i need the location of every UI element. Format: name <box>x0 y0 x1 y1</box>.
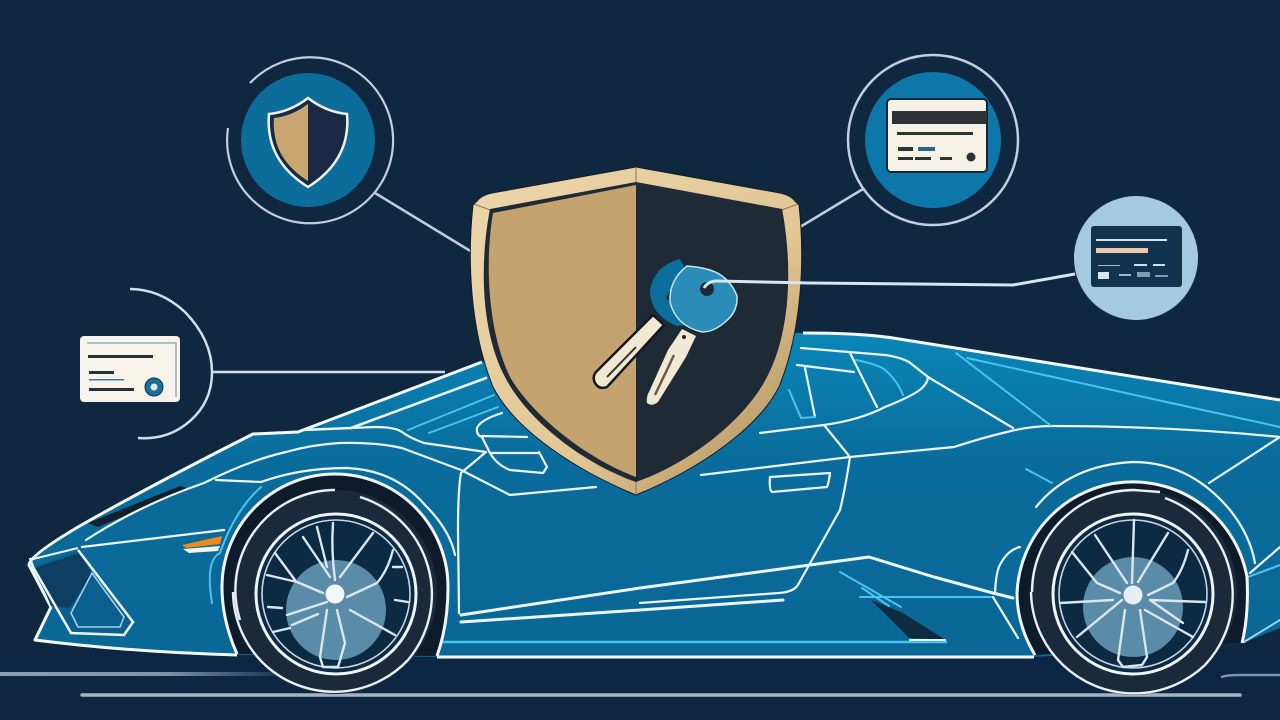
front lights and vents <box>30 486 222 635</box>
connector: top-left badge to shield <box>375 193 472 252</box>
badge disc <box>1074 196 1198 320</box>
badge: credit card <box>848 55 1018 225</box>
shield left half <box>489 185 636 477</box>
connector: top-right badge to shield <box>800 189 863 227</box>
hub <box>1124 586 1142 604</box>
road lines <box>0 672 1280 695</box>
connector: left card to shield <box>212 371 445 373</box>
side vent <box>871 600 946 640</box>
key: front blade <box>647 329 696 405</box>
rear wheel <box>1017 482 1247 695</box>
card icon <box>887 99 987 172</box>
shield frame <box>470 167 802 495</box>
central shield with keys <box>470 167 1075 495</box>
badge ring <box>227 57 393 223</box>
car body <box>29 333 1280 657</box>
panel lines (white) <box>82 348 1280 638</box>
rim <box>1053 514 1213 674</box>
car <box>29 333 1280 695</box>
rim <box>256 514 416 674</box>
id card <box>80 336 180 402</box>
key: front bow <box>670 266 737 332</box>
badge disc <box>241 73 375 207</box>
badge ring <box>848 55 1018 225</box>
front wheel <box>222 474 448 694</box>
connector: key to right badge <box>704 274 1075 288</box>
badge: left id card <box>80 289 212 438</box>
key: back blade <box>594 315 664 388</box>
shield inner dark <box>484 182 788 482</box>
shield seams <box>474 167 798 495</box>
card panel <box>1091 226 1182 287</box>
badge: small shield <box>227 57 393 223</box>
accent lines (cyan) <box>210 353 1280 642</box>
badge arc <box>130 289 212 438</box>
wheel arch <box>222 474 448 656</box>
car outline <box>29 333 1280 657</box>
hub <box>326 584 344 604</box>
key: back bow <box>650 259 690 326</box>
spokes <box>1060 520 1205 667</box>
tyre <box>1031 489 1237 695</box>
shield icon <box>269 98 347 187</box>
wheel arch <box>1017 482 1247 655</box>
badge disc <box>865 72 1001 208</box>
spokes <box>267 523 408 667</box>
badge: document panel <box>1074 196 1198 320</box>
tyre <box>233 490 437 694</box>
